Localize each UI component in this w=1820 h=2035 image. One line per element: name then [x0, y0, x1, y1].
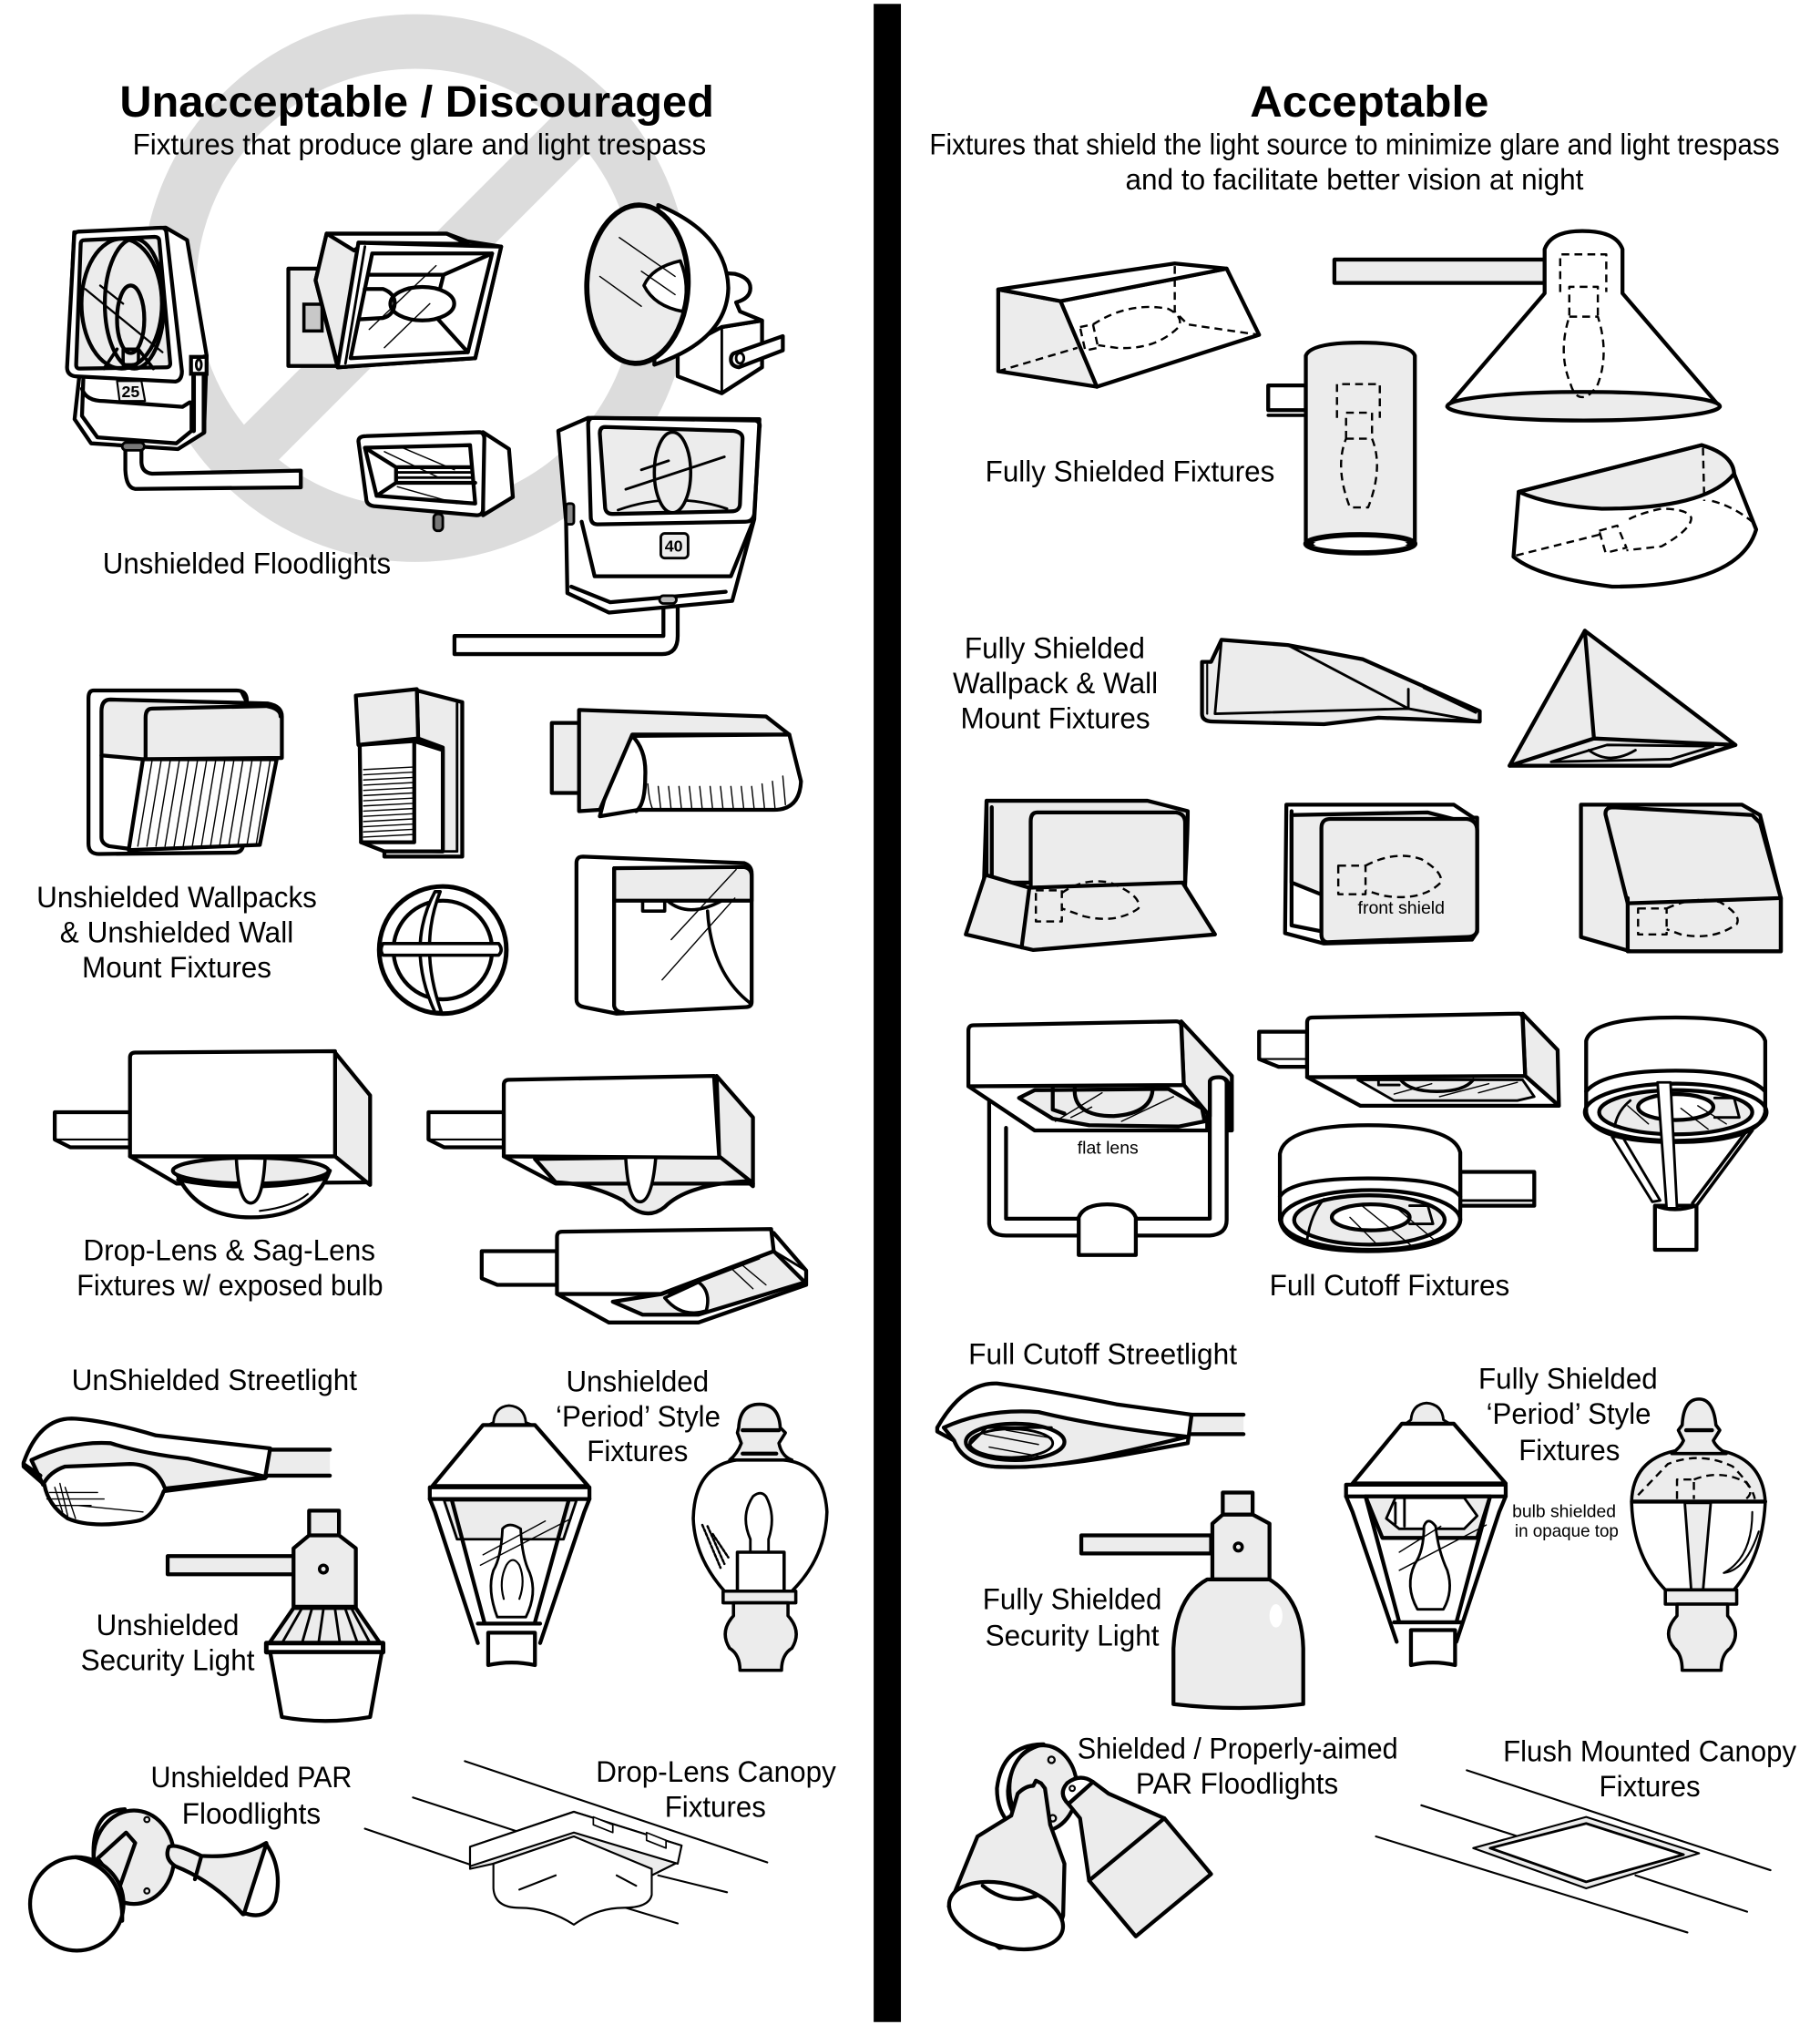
icon: shielded cone fixture: [1334, 231, 1720, 421]
icon: wallpack front shield: [1285, 804, 1477, 944]
label: unshielded wall: & Unshielded Wall: [60, 915, 293, 948]
icon: small floodlight: [358, 432, 513, 531]
panel: acceptable fixtures: [929, 77, 1796, 1961]
icon: full cutoff box: [1259, 1014, 1559, 1106]
subtitle: unacceptable: Fixtures that produce glare and light trespass: [133, 128, 706, 161]
icon: wall cylinder lens: [552, 710, 801, 816]
icon: fully shielded security light: [1081, 1492, 1304, 1708]
icon: shielded prism fixture: [998, 263, 1259, 387]
label: unshielded floodlights: Unshielded Floodlights: [103, 547, 391, 580]
icon: angled hood wallpack: [1581, 804, 1781, 951]
icon: shielded half-round fixture: [1514, 445, 1756, 587]
label: shielded properly-aimed: Shielded / Properly-aimed: [1078, 1733, 1398, 1765]
label: unshielded streetlight: UnShielded Streetlight: [72, 1364, 357, 1396]
label: unshielded par: Unshielded PAR: [151, 1761, 352, 1794]
center divider bar: [874, 4, 901, 2022]
icon: floodlight 25: [67, 228, 301, 489]
icon: full cutoff round with arm: [1280, 1125, 1534, 1251]
label: fully shielded: Fully Shielded: [965, 631, 1145, 664]
icon: unshielded streetlight: [24, 1418, 330, 1524]
label: mount fixtures: Mount Fixtures: [961, 701, 1150, 734]
label: floodlights: Floodlights: [182, 1797, 321, 1830]
label: 40: 40: [665, 537, 683, 556]
label: fully shielded period: Fully Shielded: [1478, 1362, 1658, 1395]
label: fixtures period: Fixtures: [587, 1435, 688, 1467]
icon: unshielded security light: [168, 1510, 383, 1721]
icon: unshielded acorn: [693, 1405, 827, 1671]
label: fixtures canopy: Fixtures: [1600, 1770, 1701, 1803]
label: mount fixtures: Mount Fixtures: [82, 951, 271, 984]
icon: unshielded PAR floodlights: [30, 1809, 278, 1950]
icon: wallpack lower shield: [966, 801, 1215, 950]
label: flat lens: flat lens: [1078, 1140, 1139, 1159]
label: front shield: front shield: [1358, 899, 1445, 918]
icon: full cutoff streetlight: [937, 1384, 1243, 1467]
icon: pyramid fixture: [1509, 630, 1735, 766]
icon: shielded acorn: [1631, 1399, 1765, 1671]
label: fixtures canopy: Fixtures: [665, 1791, 766, 1824]
label: fixtures with exposed bulb: Fixtures w/ exposed bulb: [77, 1269, 383, 1302]
label: drop-lens and sag-lens: Drop-Lens & Sag-Lens: [83, 1233, 375, 1266]
icon: angled sag lens fixture: [482, 1229, 806, 1323]
icon: round floodlight: [584, 203, 782, 394]
label: fully shielded security: Fully Shielded: [983, 1583, 1161, 1616]
icon: shielded period lantern: [1346, 1403, 1506, 1665]
subtitle: acceptable line 2: and to facilitate better vision at night: [1126, 163, 1584, 196]
label: security light: Security Light: [986, 1620, 1160, 1652]
label: 25: 25: [122, 383, 139, 401]
panel: unacceptable fixtures: [24, 77, 836, 1950]
icon: box wall mount: [356, 690, 462, 856]
icon: flat lens yoke fixture: [968, 1021, 1232, 1255]
label: security light: Security Light: [81, 1644, 255, 1677]
icon: unshielded period lantern: [430, 1406, 589, 1665]
icon: drop lens fixture: [55, 1051, 370, 1217]
icon: wallpack with louvers: [88, 690, 281, 854]
label: unshielded wallpacks: Unshielded Wallpacks: [36, 881, 317, 914]
title: acceptable: Acceptable: [1250, 77, 1488, 127]
icon: floodlight 40: [455, 418, 760, 654]
label: bulb shielded: bulb shielded: [1512, 1503, 1616, 1522]
title: unacceptable: Unacceptable / Discouraged: [119, 77, 714, 127]
label: full cutoff streetlight: Full Cutoff Streetlight: [968, 1337, 1237, 1370]
label: drop-lens canopy: Drop-Lens Canopy: [596, 1755, 836, 1788]
icon: round wall fixture: [379, 886, 506, 1014]
subtitle: acceptable line 1: Fixtures that shield the light source to minimize glare and light trespass: [929, 128, 1780, 161]
icon: wall floodlight: [289, 233, 501, 367]
icon: drop-lens canopy: [365, 1761, 767, 1925]
label: fully shielded fixtures: Fully Shielded Fixtures: [986, 455, 1274, 488]
icon: sag lens fixture: [428, 1076, 753, 1213]
icon: shielded cylinder fixture: [1268, 343, 1415, 553]
label: unshielded period: Unshielded: [566, 1365, 709, 1397]
label: fixtures period: Fixtures: [1518, 1434, 1620, 1467]
icon: full cutoff round on post: [1585, 1018, 1766, 1250]
icon: square wall fixture: [577, 856, 752, 1014]
label: full cutoff fixtures: Full Cutoff Fixtures: [1270, 1269, 1509, 1302]
label: wallpack and wall: Wallpack & Wall: [953, 667, 1158, 700]
label: par floodlights: PAR Floodlights: [1136, 1767, 1338, 1800]
label: flush mounted canopy: Flush Mounted Canopy: [1503, 1734, 1796, 1767]
label: in opaque top: in opaque top: [1515, 1522, 1619, 1541]
prohibition symbol: [169, 42, 662, 535]
label: period style: ‘Period’ Style: [556, 1400, 721, 1433]
icon: wedge wallpack: [1202, 639, 1479, 724]
icon: shielded PAR floodlights: [942, 1744, 1212, 1961]
icon: flush canopy fixture: [1375, 1770, 1771, 1932]
label: period style: ‘Period’ Style: [1487, 1397, 1651, 1430]
label: unshielded security: Unshielded: [97, 1609, 239, 1641]
